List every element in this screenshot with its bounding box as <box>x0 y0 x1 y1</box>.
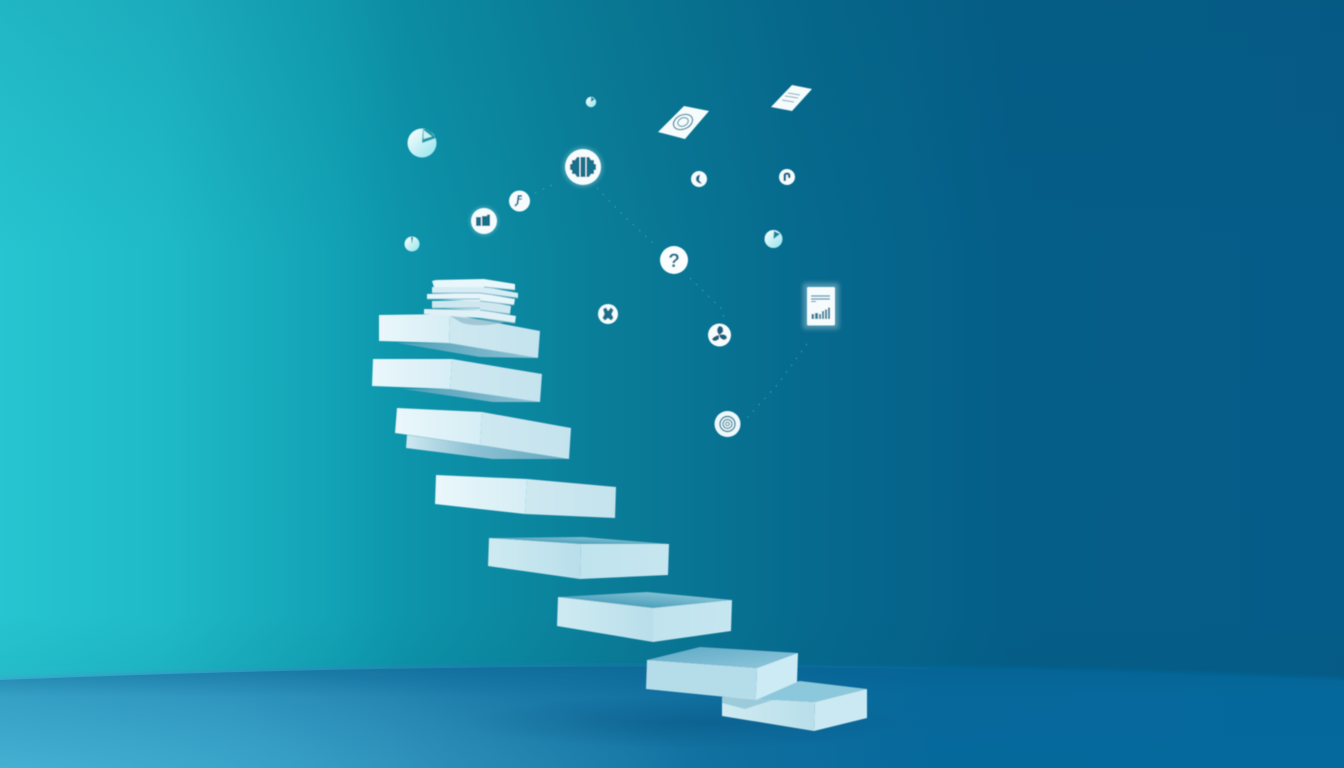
step 5 <box>488 537 669 579</box>
floor shadow <box>460 696 920 748</box>
step 1 <box>379 314 540 358</box>
icon: fan badge <box>708 324 731 346</box>
icon: large pie chart <box>408 128 436 158</box>
icon: gear badge <box>564 148 602 186</box>
icon: shield document card <box>658 106 709 139</box>
step 3 with lower block <box>395 408 571 459</box>
icon: question mark badge <box>660 246 688 274</box>
icon: question mark badge: ? <box>668 251 680 272</box>
icon: cyan pie <box>764 230 782 248</box>
icon: fingerprint badge <box>714 411 740 437</box>
icon: small pie left <box>404 236 420 252</box>
icon: clock badge <box>691 171 707 187</box>
icon: folder badge <box>470 208 498 234</box>
icon: tablet report <box>803 283 839 329</box>
step 8: bottom block <box>722 681 867 731</box>
floor <box>0 660 1344 768</box>
icon: music note badge <box>509 190 530 212</box>
stack of books <box>424 279 518 323</box>
icon: text document card <box>771 85 812 111</box>
scene objects <box>372 85 867 731</box>
icon: small dot top <box>586 97 596 107</box>
step 7 <box>646 647 798 700</box>
step 6 <box>557 592 732 642</box>
icon: puzzle badge <box>598 304 618 324</box>
step 2 <box>372 359 542 402</box>
dotted connector lines <box>535 182 807 418</box>
icon: info badge <box>779 169 795 185</box>
step 4 <box>435 475 616 518</box>
